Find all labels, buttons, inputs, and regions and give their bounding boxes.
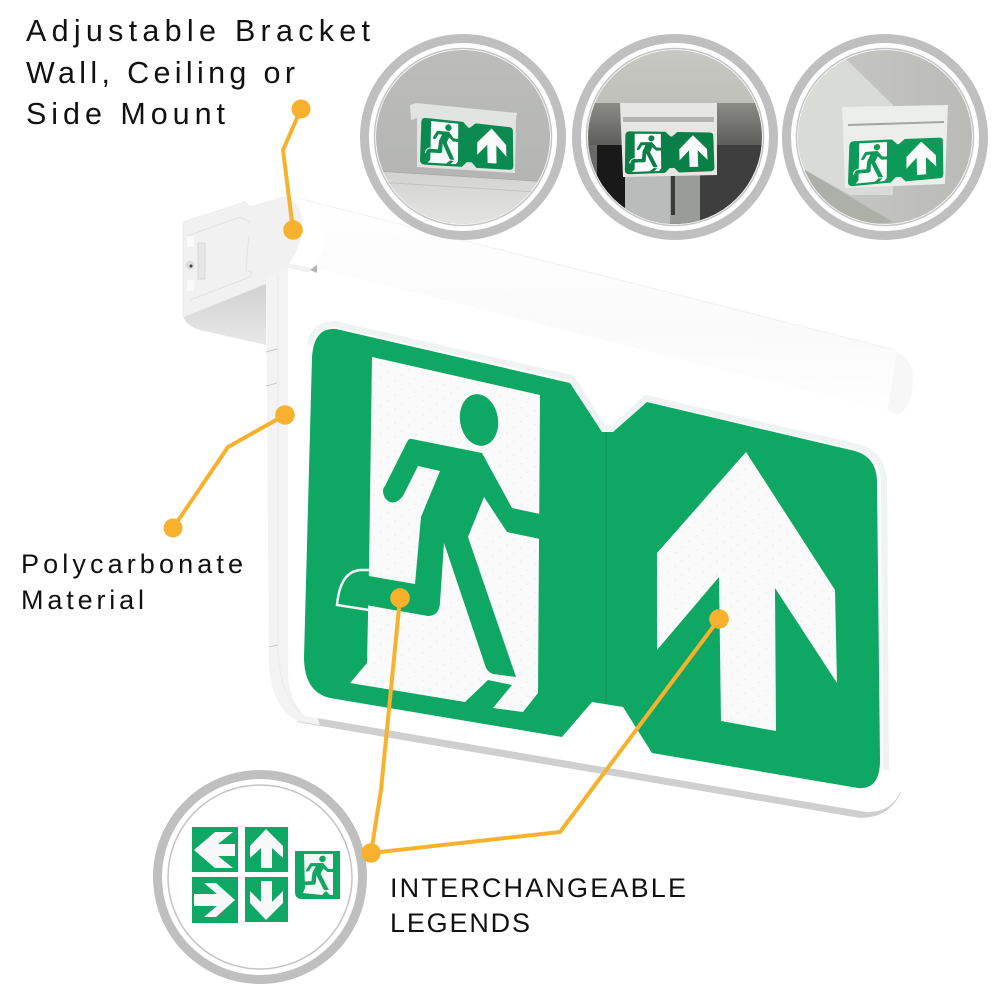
- legend: up arrow: [245, 827, 288, 872]
- panel centre seam: [605, 432, 607, 703]
- hinge cap: [248, 197, 325, 273]
- white frame: [288, 268, 903, 812]
- frame side seam marks: [266, 349, 278, 647]
- text: material label: Polycarbonate: [21, 549, 243, 579]
- text: bracket label: Wall, Ceiling or: [26, 56, 295, 90]
- legend: down arrow: [245, 877, 288, 922]
- exit sign product: [183, 197, 913, 818]
- foot outline: [337, 570, 369, 610]
- callout line: bracket: [283, 100, 310, 240]
- legend: left arrow: [192, 827, 238, 872]
- text: legends label: INTERCHANGEABLE: [390, 873, 686, 903]
- text: bracket label: [26, 14, 371, 131]
- up arrow: [657, 452, 837, 731]
- mounting bracket: [183, 197, 318, 317]
- frame bottom edge shadow: [297, 716, 901, 818]
- running man: [343, 391, 540, 677]
- green legend panel: [304, 329, 880, 788]
- text: legends label: LEGENDS: [390, 908, 530, 938]
- text: bracket label: Side Mount: [26, 97, 226, 131]
- text: legends label: [390, 873, 686, 938]
- door opening: [350, 357, 540, 712]
- tube top edge: [305, 200, 895, 350]
- tube end shade: [887, 352, 913, 415]
- side strip of frame: [266, 268, 320, 725]
- mounting bracket underside: [183, 280, 266, 345]
- callout line: polycarbonate: [164, 405, 295, 538]
- rim around legend panel: [310, 324, 886, 770]
- text: material label: Material: [21, 585, 144, 615]
- legends circle: [158, 774, 362, 980]
- photo circle: wall mount: [364, 38, 562, 240]
- legend: right arrow: [192, 877, 238, 923]
- photo circle: ceiling mount: [576, 38, 774, 236]
- tube housing: [300, 199, 913, 415]
- photo circle: side mount: [786, 38, 984, 236]
- text: material label: [21, 549, 243, 615]
- legend: running man: [295, 851, 340, 899]
- text: bracket label: Adjustable Bracket: [26, 14, 371, 48]
- callout line: interchangeable legends: [361, 588, 729, 863]
